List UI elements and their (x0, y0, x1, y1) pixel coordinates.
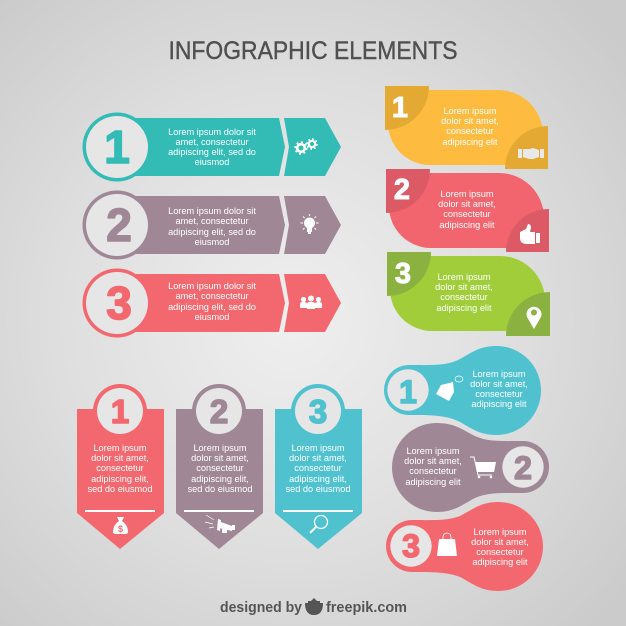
card 1: Lorem ipsum (93, 443, 147, 453)
banner 2: Lorem ipsum dolor sit (168, 206, 256, 216)
banner 1: amet, consectetur (175, 137, 249, 147)
blob 2 (392, 423, 549, 512)
banner 3 (82, 268, 341, 338)
banner 2: adipiscing elit, sed do (168, 227, 256, 237)
blob 3 (386, 502, 543, 591)
banner 1: adipiscing elit, sed do (168, 147, 256, 157)
icon: handshake (518, 148, 544, 159)
blob 3: consectetur (476, 547, 524, 557)
card 2: dolor sit amet, (191, 453, 249, 463)
icon: freepik logo (305, 598, 323, 615)
footer credit: freepik.com (326, 600, 407, 616)
blob 2: 2 (514, 450, 532, 486)
blob 1 (384, 346, 541, 435)
blob 1: consectetur (475, 389, 523, 399)
icon: people (300, 296, 322, 309)
banner 3: adipiscing elit, sed do (168, 302, 256, 312)
banner 3: eiusmod (195, 312, 229, 322)
card 2: Lorem ipsum (193, 443, 247, 453)
card 1: consectetur (96, 463, 144, 473)
icon: megaphone (205, 515, 235, 533)
card 2: adipiscing elit, (191, 474, 249, 484)
banner 1: eiusmod (195, 157, 229, 167)
card 1: dolor sit amet, (91, 453, 149, 463)
panel: pentagon cards (77, 384, 362, 549)
banner 3: Lorem ipsum dolor sit (168, 281, 256, 291)
banner 3: 3 (106, 277, 132, 329)
icon: price tag (436, 376, 463, 401)
blob 1: 1 (399, 374, 417, 410)
card 3 (275, 384, 362, 549)
footer credit: designed by (220, 600, 302, 616)
tab 3 (387, 252, 550, 336)
card 2: 2 (210, 393, 228, 430)
card 2: consectetur (196, 463, 244, 473)
card 3: dolor sit amet, (289, 453, 347, 463)
blob 2: adipiscing elit (405, 477, 461, 487)
card 1: 1 (111, 393, 129, 430)
blob 3: dolor sit amet, (471, 537, 529, 547)
title: INFOGRAPHIC ELEMENTS (168, 37, 458, 65)
card 3: Lorem ipsum (291, 443, 345, 453)
card 2 (176, 384, 263, 549)
card 2: sed do eiusmod (188, 484, 252, 494)
tab 1 (385, 86, 548, 169)
tab 1: dolor sit amet, (441, 116, 499, 126)
blob 3: Lorem ipsum (473, 527, 527, 537)
tab 2: dolor sit amet, (438, 199, 496, 209)
card 3: sed do eiusmod (286, 484, 350, 494)
icon: thumbs up (520, 224, 540, 244)
panel: arrow banners (82, 112, 341, 338)
banner 2 (82, 190, 341, 260)
icon: light bulb (300, 214, 318, 234)
icon: shopping cart (470, 457, 496, 478)
blob 2: dolor sit amet, (404, 456, 462, 466)
banner 1: 1 (104, 121, 130, 173)
tab 1: adipiscing elit (442, 137, 498, 147)
icon: magnifier (310, 516, 328, 533)
tab 1: consectetur (446, 126, 494, 136)
blob 3: adipiscing elit (472, 557, 528, 567)
icon: shopping bag (437, 533, 457, 556)
blob 2: consectetur (409, 466, 457, 476)
tab 2: Lorem ipsum (440, 189, 494, 199)
tab 2 (386, 169, 549, 252)
blob 1: dolor sit amet, (470, 379, 528, 389)
tab 3: dolor sit amet, (435, 282, 493, 292)
tab 1: Lorem ipsum (443, 106, 497, 116)
card 3: adipiscing elit, (289, 474, 347, 484)
tab 3: 3 (395, 258, 411, 290)
tab 3: adipiscing elit (436, 303, 492, 313)
blob 1: adipiscing elit (471, 399, 527, 409)
footer credit (220, 598, 407, 616)
card 3: 3 (309, 393, 327, 430)
banner 2: eiusmod (195, 237, 229, 247)
banner 2: amet, consectetur (175, 216, 249, 226)
panel: rounded tabs (385, 86, 550, 336)
blob 1: Lorem ipsum (472, 369, 526, 379)
tab 2: consectetur (443, 209, 491, 219)
tab 3: consectetur (440, 292, 488, 302)
banner 2: 2 (106, 199, 132, 251)
banner 1 (82, 112, 341, 182)
banner 3: amet, consectetur (175, 291, 249, 301)
card 1: sed do eiusmod (88, 484, 152, 494)
blob 2: Lorem ipsum (406, 446, 460, 456)
card 1 (77, 384, 164, 549)
icon: gears (295, 139, 317, 154)
icon: money bag (113, 517, 128, 534)
tab 2: 2 (394, 174, 410, 206)
banner 1: Lorem ipsum dolor sit (168, 127, 256, 137)
icon: map pin (526, 307, 542, 329)
icon: money bag: $ (118, 524, 123, 534)
card 1: adipiscing elit, (91, 474, 149, 484)
tab 1: 1 (392, 92, 408, 124)
panel: bulb blobs (384, 346, 549, 591)
tab 2: adipiscing elit (439, 220, 495, 230)
card 3: consectetur (294, 463, 342, 473)
tab 3: Lorem ipsum (437, 272, 491, 282)
blob 3: 3 (402, 528, 420, 564)
